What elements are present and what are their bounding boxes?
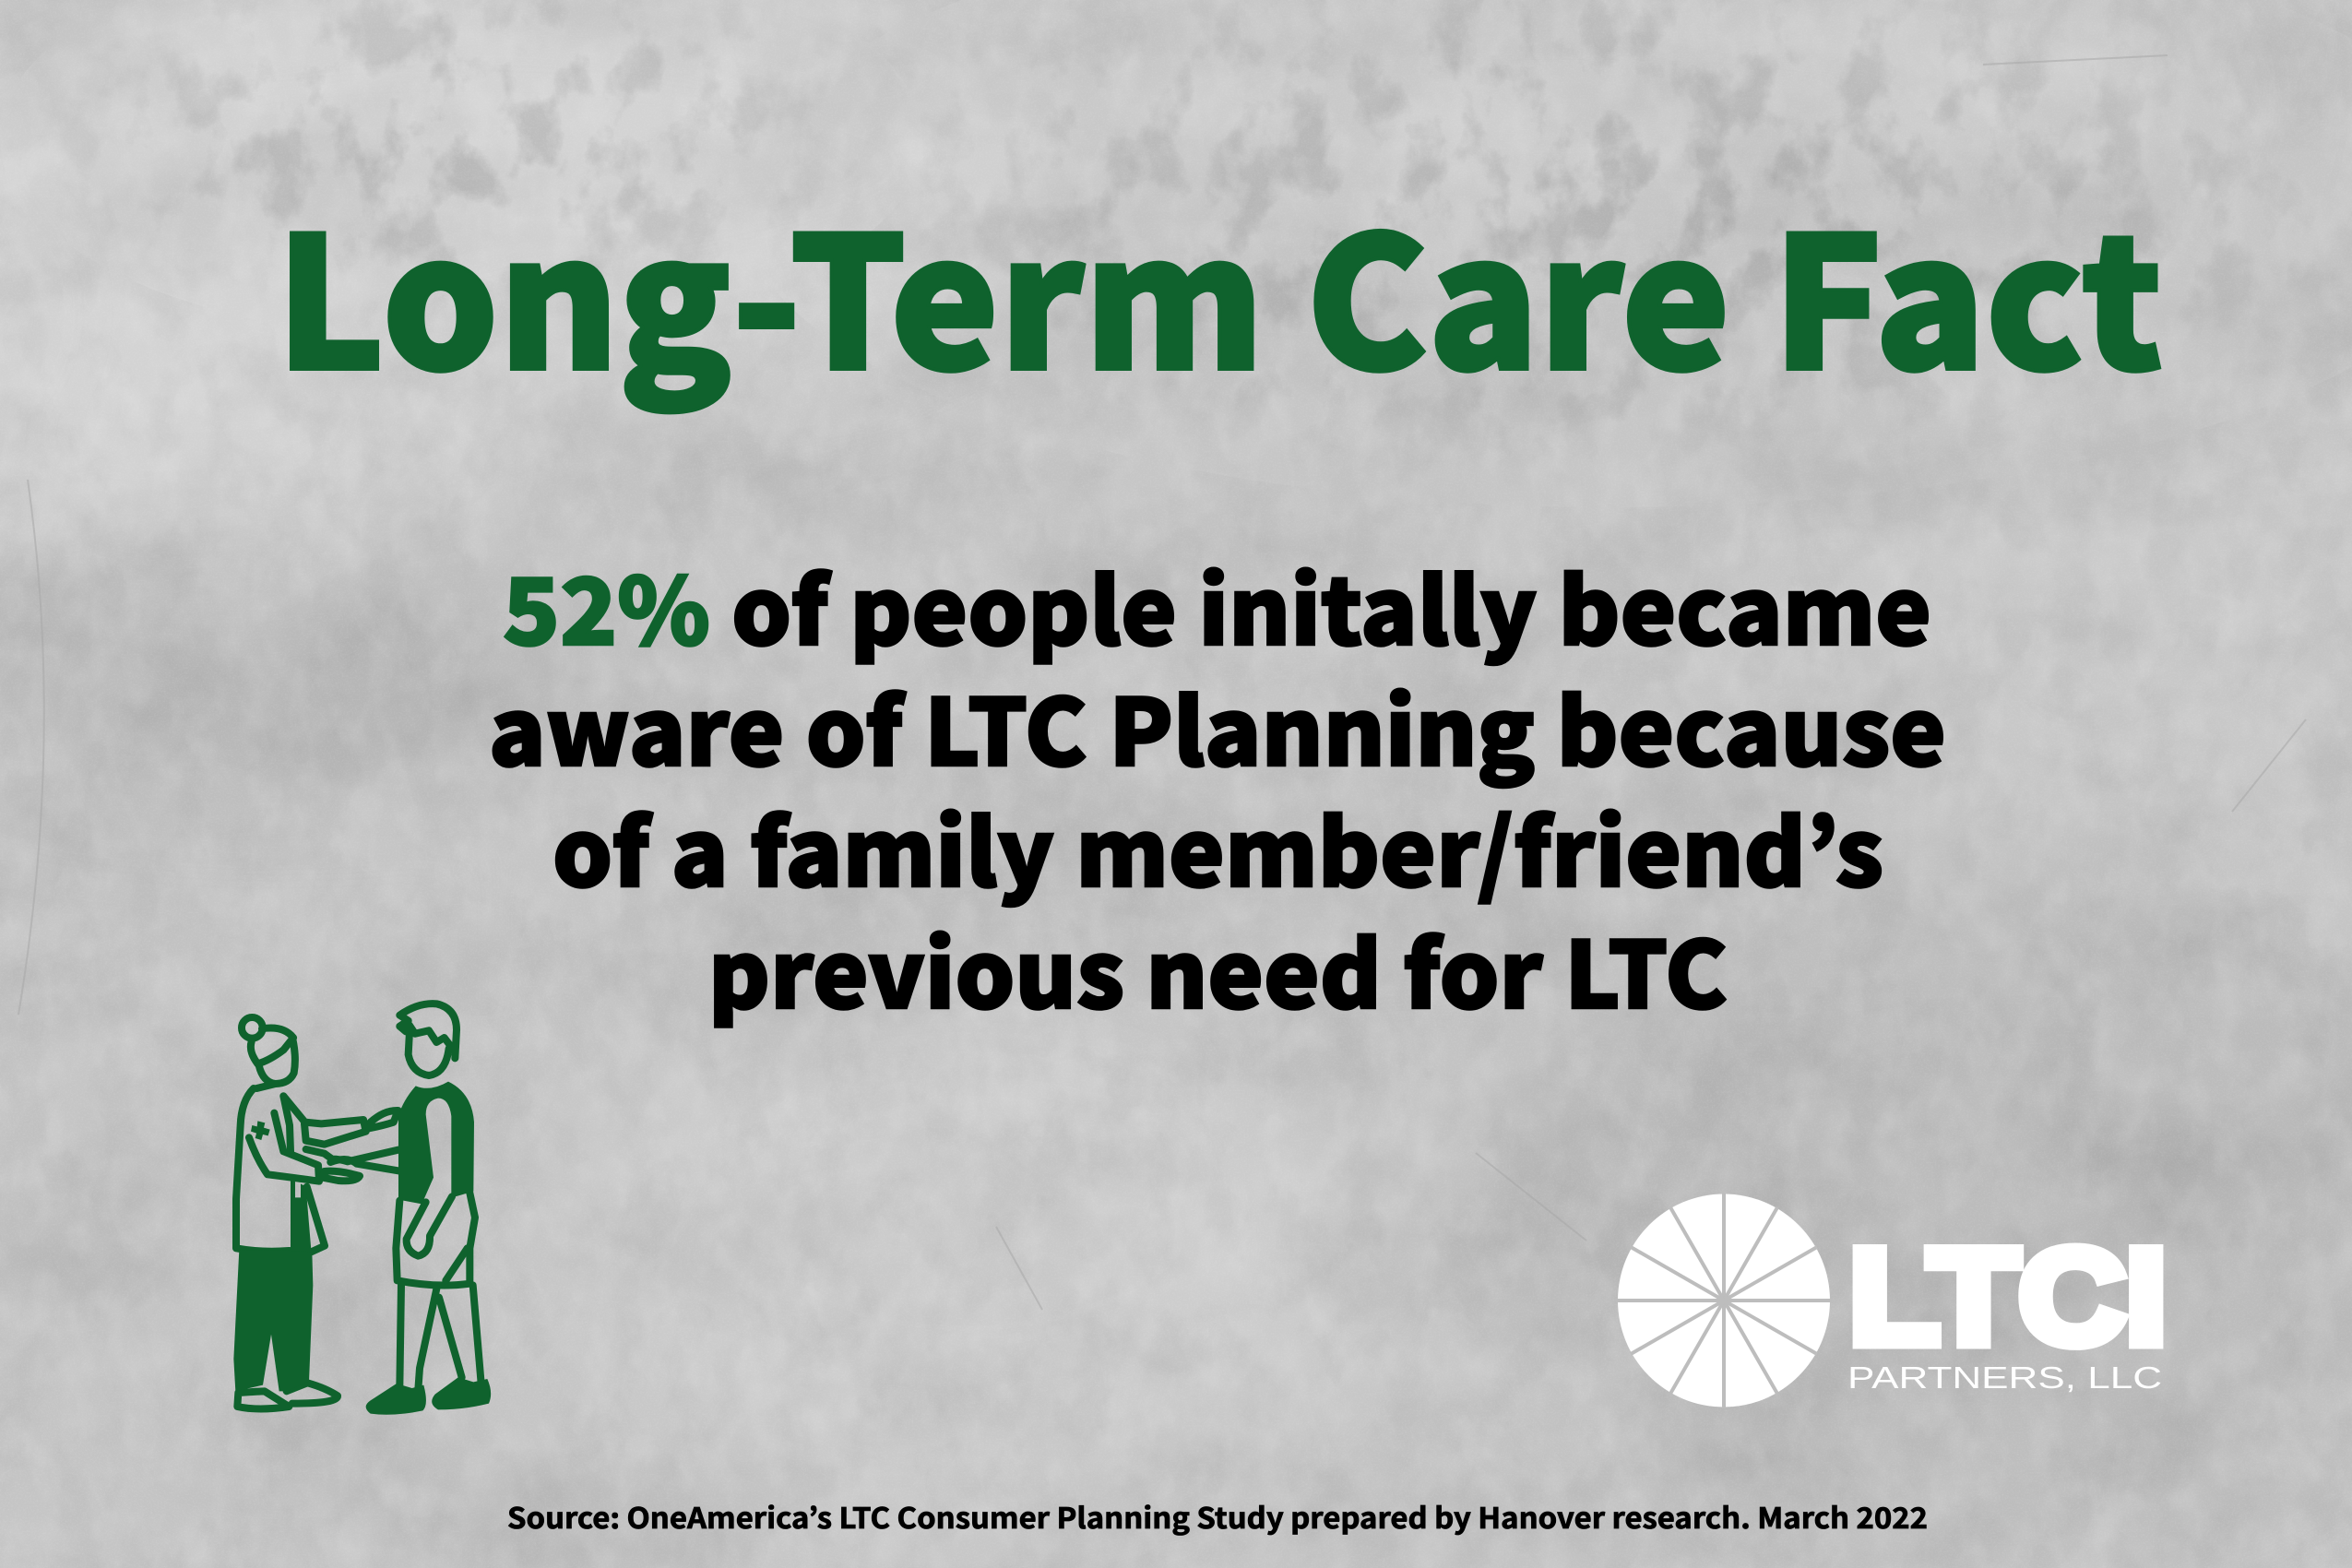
patient torso [398, 1082, 474, 1204]
logo wordmark: PARTNERS, LLC [1847, 1360, 2162, 1395]
title: Long-Term Care Fact [276, 158, 2163, 422]
patient figure [396, 1004, 481, 1390]
line 2: aware of LTC Planning because [489, 659, 1946, 792]
source note: Source: OneAmerica’s LTC Consumer Planning Study prepared by Hanover research. March 2022 [507, 1495, 1928, 1537]
nurse cross badge [251, 1121, 270, 1140]
line 4: previous need for LTC [708, 901, 1728, 1035]
logo wheel [1616, 1193, 1832, 1408]
patient shoes [366, 1384, 426, 1415]
main statement [489, 538, 1946, 1035]
nurse shirt strip [291, 1181, 311, 1250]
icon: nurse and patient [233, 1004, 491, 1415]
line 3: of a family member/friend’s [552, 779, 1883, 913]
nurse trousers [233, 1250, 313, 1391]
logo: LTCI Partners [1616, 1193, 2167, 1408]
logo wordmark: LTCI [1849, 1221, 2167, 1372]
nurse figure [236, 1017, 398, 1408]
line 1 with highlighted percentage: 52% of people initally became [503, 538, 1931, 671]
